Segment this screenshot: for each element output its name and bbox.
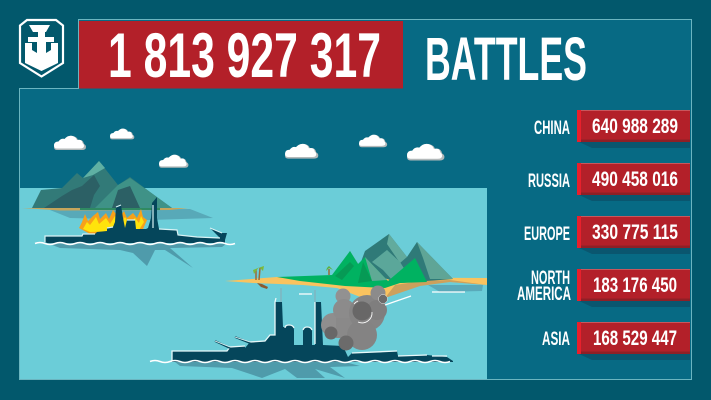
island: right <box>225 234 487 298</box>
wreck on beach <box>257 283 268 289</box>
row: Russia <box>528 163 690 201</box>
row: Asia <box>542 322 690 360</box>
row: China <box>534 110 690 148</box>
row: Europe: EUROPE <box>524 224 570 245</box>
palm trees <box>256 268 260 280</box>
smoke plume <box>321 286 388 350</box>
ship reflection <box>47 243 226 268</box>
ship wave <box>35 242 235 244</box>
row: North America: AMERICA <box>517 284 571 305</box>
heading: battles: BATTLES <box>425 25 587 93</box>
row: China: CHINA <box>534 118 570 139</box>
sea <box>20 188 487 379</box>
row: North America <box>517 268 690 307</box>
row: China: 640 988 289 <box>592 115 678 138</box>
row: Europe <box>524 216 690 254</box>
row: Russia: RUSSIA <box>528 171 570 192</box>
ship hull <box>172 302 453 362</box>
row: North America: NORTH <box>531 268 570 289</box>
title total: red banner: 1 813 927 317 <box>108 21 381 91</box>
island: left <box>22 161 213 220</box>
battleship: left, burning <box>35 197 235 268</box>
flames <box>79 209 147 234</box>
logo: anchor shield <box>20 20 63 76</box>
clouds <box>54 129 444 168</box>
row: Asia: 168 529 447 <box>593 327 677 350</box>
ship reflection <box>175 362 360 378</box>
row: Russia: 490 458 016 <box>592 168 678 191</box>
ship wave <box>150 360 450 362</box>
row: Asia: ASIA <box>542 329 570 350</box>
battleship: right, smoking <box>150 286 465 378</box>
title total: red banner <box>79 21 403 91</box>
row: North America: 183 176 450 <box>593 274 677 297</box>
row: Europe: 330 775 115 <box>592 221 678 244</box>
ship hull <box>45 197 227 243</box>
